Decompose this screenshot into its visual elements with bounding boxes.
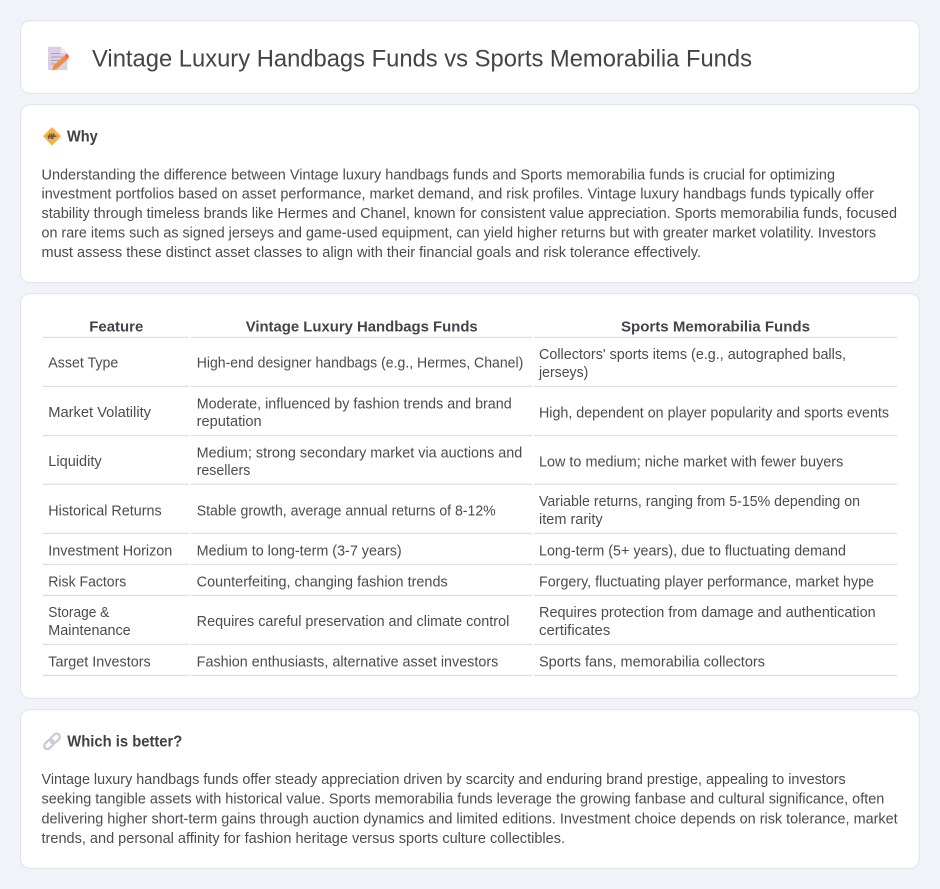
title: Vintage Luxury Handbags Funds vs Sports Memorabilia Funds xyxy=(92,47,752,73)
table row: risk factors xyxy=(48,575,874,591)
table header row: Sports Memorabilia Funds xyxy=(621,319,810,336)
text block: why paragraph: on rare items such as signed jerseys and game-used equipment, can yield higher returns but with greater market volatility. Investors xyxy=(42,226,876,242)
table row: market volatility: Market Volatility xyxy=(48,405,152,421)
table row: historical returns: Stable growth, average annual returns of 8-12% xyxy=(197,503,496,519)
text block: which is better paragraph: Vintage luxury handbags funds offer steady appreciation driven by scarcity and enduring brand prestige, appealing to investors xyxy=(42,772,846,788)
table row: investment horizon: Medium to long-term (3-7 years) xyxy=(197,544,402,560)
table row: asset type: Collectors' sports items (e.g., autographed balls, xyxy=(539,347,846,363)
text block: why paragraph: Understanding the difference between Vintage luxury handbags funds and Sports memorabilia funds is crucial for optimizing xyxy=(42,167,835,183)
panel: comparison table xyxy=(21,294,919,698)
table row: historical returns: Variable returns, ranging from 5-15% depending on xyxy=(539,494,860,510)
table row: asset type xyxy=(48,347,846,381)
table row: risk factors: Forgery, fluctuating player performance, market hype xyxy=(539,575,874,591)
table row: risk factors: Counterfeiting, changing fashion trends xyxy=(197,575,448,591)
table row: historical returns xyxy=(48,494,860,528)
heading: which is better: Which is better? xyxy=(67,734,182,751)
panel: title header xyxy=(21,21,919,93)
table row: market volatility: reputation xyxy=(197,414,262,430)
table header row: Vintage Luxury Handbags Funds xyxy=(246,319,478,336)
icon: chain link xyxy=(43,732,61,750)
table row: liquidity xyxy=(48,445,843,479)
panel: which is better xyxy=(21,710,919,868)
text block: why paragraph: must assess these distinct asset classes to align with their financial goals and risk tolerance effectively. xyxy=(42,245,701,261)
text block: which is better paragraph: trends, and personal affinity for fashion heritage versus sports culture collectibles. xyxy=(42,831,565,847)
text block: which is better paragraph xyxy=(42,772,898,847)
table row: asset type: Asset Type xyxy=(48,356,118,372)
table row: asset type: jerseys) xyxy=(538,365,588,381)
table row: liquidity: Medium; strong secondary market via auctions and xyxy=(197,445,522,461)
table row: investment horizon: Investment Horizon xyxy=(48,544,172,560)
table row: target investors: Target Investors xyxy=(48,655,151,671)
table row: asset type: High-end designer handbags (e.g., Hermes, Chanel) xyxy=(197,356,523,372)
table row: market volatility: Moderate, influenced by fashion trends and brand xyxy=(197,396,512,412)
panel: why xyxy=(21,105,919,283)
table row: liquidity: Low to medium; niche market with fewer buyers xyxy=(539,454,843,470)
table row: market volatility: High, dependent on player popularity and sports events xyxy=(539,405,889,421)
icon: orange diamond xyxy=(44,128,60,145)
table row: target investors: Sports fans, memorabilia collectors xyxy=(539,655,765,671)
text block: which is better paragraph: seeking tangible assets with historical value. Sports memorabilia funds leverage the growing fanbase and cultural significance, often xyxy=(42,792,884,808)
table row: market volatility xyxy=(48,396,889,430)
table row: liquidity: resellers xyxy=(197,463,250,479)
table row: storage and maintenance: Requires careful preservation and climate control xyxy=(197,614,509,630)
table row: storage and maintenance: Storage & xyxy=(48,605,110,621)
icon: document with pencil xyxy=(48,47,69,70)
text block: why paragraph: investment portfolios based on asset performance, market demand, and risk profiles. Vintage luxury handbags funds typically offer xyxy=(42,187,874,203)
table row: investment horizon xyxy=(48,544,846,560)
table row: storage and maintenance: Requires protection from damage and authentication xyxy=(539,605,876,621)
table row: storage and maintenance: certificates xyxy=(539,623,610,639)
table row: target investors: Fashion enthusiasts, alternative asset investors xyxy=(197,655,498,671)
table row: investment horizon: Long-term (5+ years), due to fluctuating demand xyxy=(539,544,846,560)
text block: which is better paragraph: delivering higher short-term gains through auction dynamics and limited editions. Investment choice depends on risk tolerance, market xyxy=(42,811,898,827)
heading: why: Why xyxy=(67,129,98,146)
table row: historical returns: Historical Returns xyxy=(48,503,162,519)
text block: why paragraph: stability through timeless brands like Hermes and Chanel, known for consistent value appreciation. Sports memorabilia funds, focused xyxy=(42,206,897,222)
table row: target investors xyxy=(48,655,765,671)
table row: storage and maintenance: Maintenance xyxy=(48,623,131,639)
table row: risk factors: Risk Factors xyxy=(48,575,126,591)
table row: liquidity: Liquidity xyxy=(48,454,103,470)
table header row: Feature xyxy=(89,319,143,336)
text block: why paragraph xyxy=(42,167,897,261)
table header row xyxy=(89,319,810,336)
table row: historical returns: item rarity xyxy=(539,512,604,528)
table row: storage and maintenance xyxy=(48,605,876,639)
